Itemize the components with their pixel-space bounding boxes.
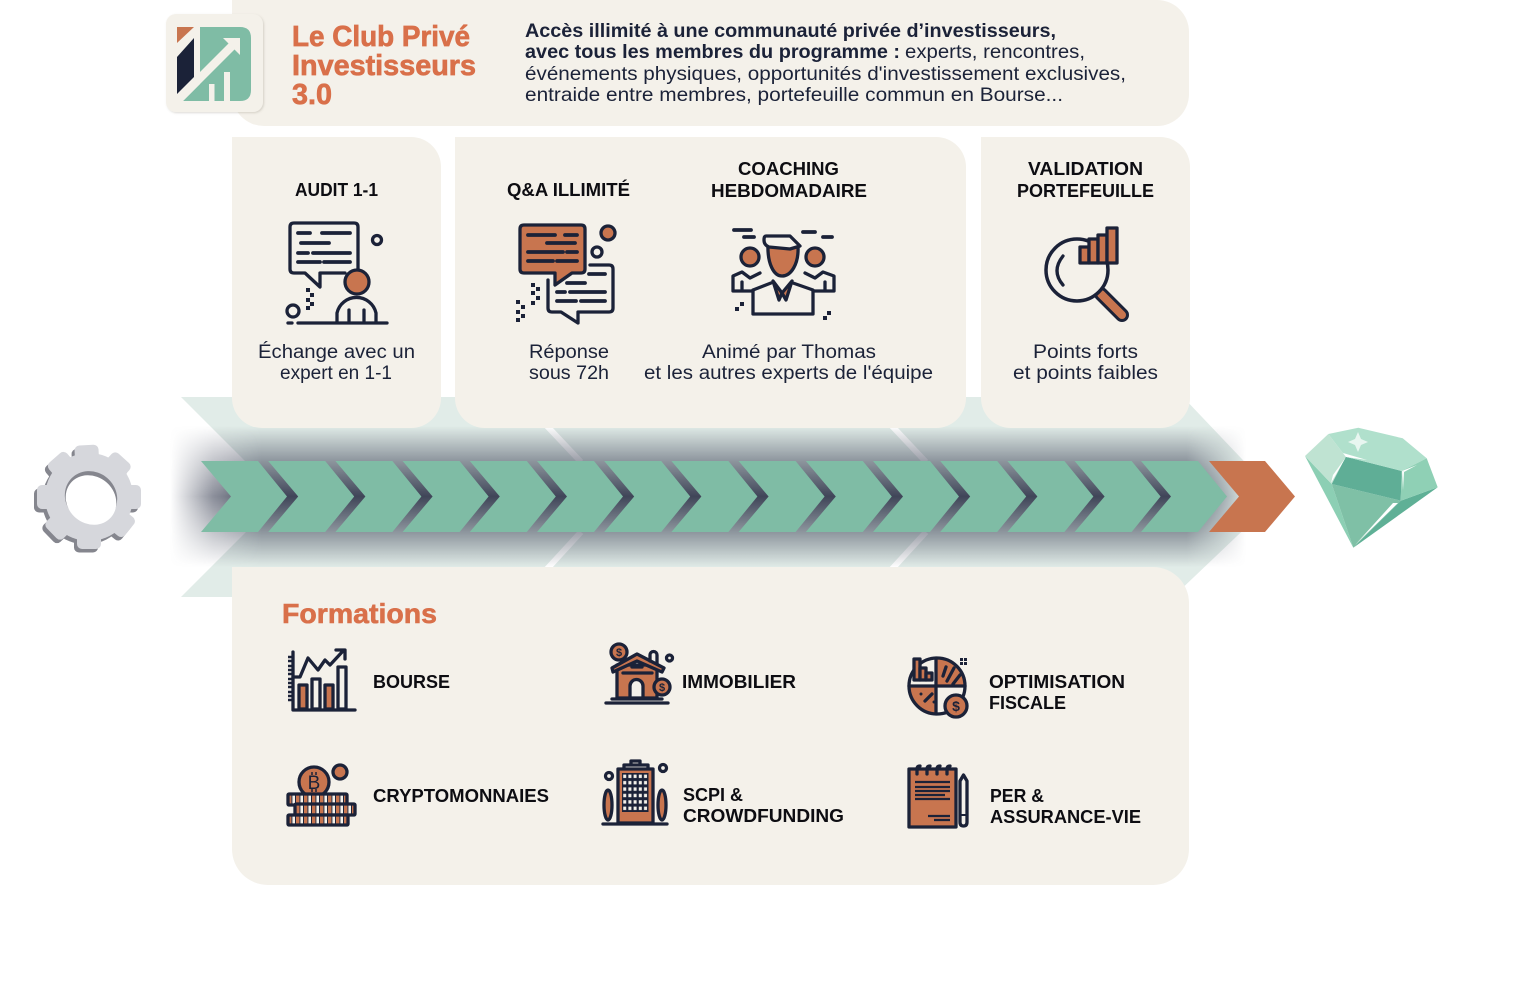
icon: chat bubbles bbox=[516, 225, 615, 323]
label: optimisation fiscale: FISCALE bbox=[989, 692, 1066, 713]
item: optimisation fiscale bbox=[909, 658, 1125, 717]
icon: coaching team bbox=[733, 230, 834, 320]
icon: house with coins: $ bbox=[659, 682, 665, 694]
panel: formations bbox=[232, 567, 1189, 885]
heading: coaching bbox=[711, 158, 867, 201]
description: Q&A bbox=[529, 342, 609, 384]
heading: coaching: HEBDOMADAIRE bbox=[711, 180, 867, 201]
description: audit: expert en 1-1 bbox=[280, 363, 392, 384]
column: Q&A bbox=[507, 179, 630, 384]
icon: magnifier with bars bbox=[1046, 228, 1122, 315]
heading: validation bbox=[1017, 158, 1154, 201]
intro text: événements physiques, opportunités d'investissement exclusives, bbox=[525, 64, 1126, 85]
title: 3.0 bbox=[292, 79, 332, 111]
item: immobilier bbox=[606, 644, 796, 703]
icon: house with coins bbox=[606, 644, 672, 703]
panel: top intro bbox=[166, 0, 1189, 126]
icon: expert speech bubble bbox=[287, 223, 387, 323]
label: optimisation fiscale bbox=[989, 671, 1125, 713]
column: coaching bbox=[644, 158, 933, 384]
label: per: ASSURANCE-VIE bbox=[990, 806, 1141, 827]
label: optimisation fiscale: OPTIMISATION bbox=[989, 671, 1125, 692]
intro text: Accès illimité à une communauté privée d’investisseurs, bbox=[525, 21, 1056, 42]
icon: bitcoin stack: B bbox=[308, 773, 320, 794]
description: Q&A: Réponse bbox=[529, 342, 609, 363]
icon: pie chart with coin: $ bbox=[952, 698, 960, 714]
icon: gem bbox=[1305, 428, 1438, 548]
heading: formations: Formations bbox=[282, 598, 437, 629]
heading: coaching: COACHING bbox=[738, 158, 839, 179]
chevron shadow bbox=[160, 426, 1260, 567]
intro text: experts, rencontres, bbox=[905, 42, 1085, 63]
icon: club logo bbox=[166, 14, 263, 112]
icon: notepad and pencil bbox=[909, 766, 967, 827]
label: per bbox=[990, 785, 1141, 827]
description: coaching: Animé par Thomas bbox=[702, 342, 876, 363]
label: per: PER & bbox=[990, 785, 1044, 806]
description: validation: et points faibles bbox=[1013, 363, 1158, 384]
title: Le Club Privé bbox=[292, 21, 470, 53]
icon: bitcoin stack bbox=[288, 765, 355, 825]
panel: portfolio validation bbox=[981, 137, 1190, 428]
heading: validation: VALIDATION bbox=[1028, 158, 1143, 179]
description: coaching bbox=[644, 342, 933, 384]
intro text: entraide entre membres, portefeuille commun en Bourse... bbox=[525, 85, 1063, 106]
icon: pie chart with coin bbox=[909, 658, 967, 717]
icon: building and trees bbox=[603, 761, 667, 824]
background arrow band bbox=[181, 397, 1278, 597]
item: cryptomonnaies bbox=[288, 765, 549, 825]
description: coaching: et les autres experts de l'équipe bbox=[644, 363, 933, 384]
label: bourse: BOURSE bbox=[373, 671, 450, 692]
item: bourse bbox=[288, 650, 450, 710]
item: scpi bbox=[603, 761, 844, 826]
icon: house with coins: $ bbox=[616, 647, 622, 659]
description: Q&A: sous 72h bbox=[529, 363, 609, 384]
panel: audit bbox=[232, 137, 441, 428]
heading: Q&A: Q&A ILLIMITÉ bbox=[507, 179, 630, 200]
description: validation: Points forts bbox=[1033, 342, 1138, 363]
title: Investisseurs bbox=[292, 50, 476, 82]
label: scpi bbox=[683, 784, 844, 826]
heading: audit: AUDIT 1-1 bbox=[295, 179, 378, 200]
heading: validation: PORTEFEUILLE bbox=[1017, 180, 1154, 201]
item: per bbox=[909, 766, 1141, 827]
panel: Q&A and coaching bbox=[455, 137, 966, 428]
description: audit bbox=[258, 342, 415, 384]
title bbox=[292, 21, 476, 111]
description: validation bbox=[1013, 342, 1158, 384]
final orange chevron bbox=[1209, 461, 1295, 532]
intro text bbox=[525, 21, 1126, 106]
description: audit: Échange avec un bbox=[258, 342, 415, 363]
label: cryptomonnaies: CRYPTOMONNAIES bbox=[373, 785, 549, 806]
process arrow: chevrons bbox=[201, 461, 1227, 532]
icon: gear bbox=[34, 444, 141, 552]
icon: stock chart bbox=[288, 650, 355, 710]
label: immobilier: IMMOBILIER bbox=[682, 671, 796, 692]
intro text: avec tous les membres du programme : bbox=[525, 42, 900, 63]
label: scpi: SCPI & bbox=[683, 784, 743, 805]
label: scpi: CROWDFUNDING bbox=[683, 805, 844, 826]
